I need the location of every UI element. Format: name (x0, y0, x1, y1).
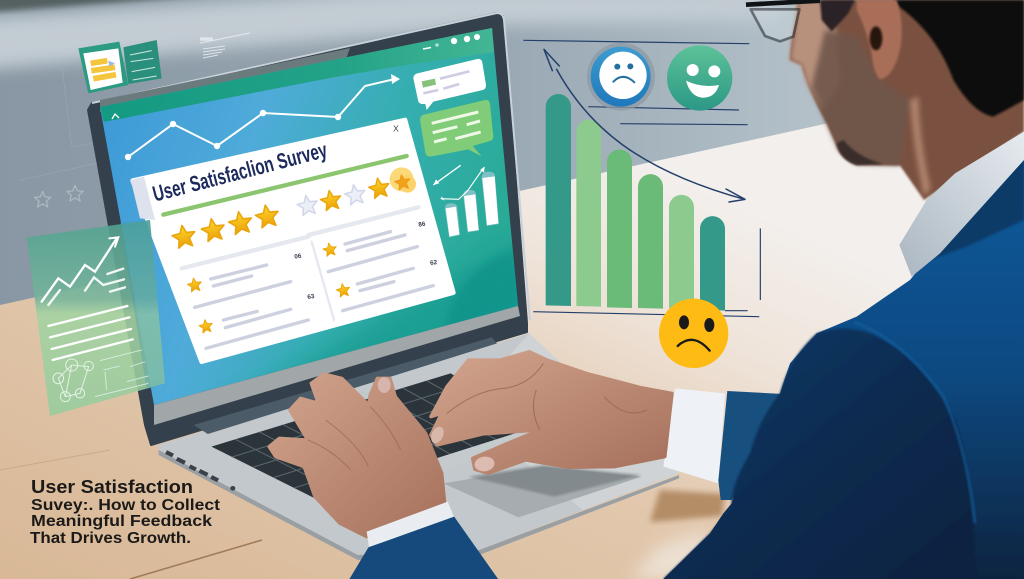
caption: Meaningful Feedback (31, 513, 212, 530)
ear (857, 0, 902, 79)
head, hair, ear and glasses (746, 0, 1024, 200)
caption (30, 476, 221, 547)
screen frame (88, 13, 530, 445)
laptop (88, 13, 679, 560)
decline chart with emojis (523, 40, 760, 368)
list scores: 62 (430, 259, 438, 267)
display chin (154, 306, 520, 425)
forearm sleeve (718, 391, 783, 500)
list scores: X (393, 124, 399, 134)
shirt cuff: left arm (367, 502, 454, 549)
upper arm (663, 329, 975, 579)
hinge (194, 337, 497, 434)
shirt collar (899, 132, 1024, 277)
survey card (131, 120, 453, 362)
keyboard (211, 373, 542, 498)
icon: teal list card (123, 40, 162, 84)
speech bubble: white (413, 59, 486, 110)
list scores: 63 (307, 293, 315, 301)
survey title: User Satisfaclion Survey (150, 137, 330, 207)
report trend arrow (42, 237, 125, 305)
laptop base (158, 333, 679, 560)
man (269, 0, 1024, 579)
caption: User Satisfaction (31, 476, 193, 497)
chart rules (523, 40, 760, 317)
list scores: 86 (418, 221, 426, 229)
jacket body (663, 157, 1024, 579)
star rating row (171, 167, 416, 249)
left sleeve (349, 517, 499, 579)
list scores: 06 (294, 253, 302, 261)
tiny floating note on wall (200, 33, 250, 58)
jacket collar shade (930, 157, 1024, 260)
face light (790, 0, 840, 110)
list stars (187, 242, 351, 333)
neck and head skin (790, 0, 1024, 200)
decorative outline stars (34, 185, 83, 207)
left hand (269, 374, 445, 537)
report text lines (48, 306, 133, 360)
list rows (182, 207, 433, 348)
caption: Suvey:. How to Collect (31, 497, 221, 514)
caption: That Drives Growth. (30, 530, 191, 547)
mini bar chart on screen (433, 165, 499, 237)
speech bubble: green (420, 100, 493, 157)
sad emoji: blue (587, 43, 655, 111)
list scores (294, 124, 438, 301)
line chart on screen (125, 74, 400, 160)
bars (546, 94, 725, 311)
jaw shadow (837, 140, 883, 165)
shoulder seam (853, 322, 975, 523)
title underline (163, 156, 407, 215)
neck highlight (910, 97, 931, 197)
jacket (663, 157, 1024, 579)
right hand (429, 352, 672, 473)
translucent green report panel (27, 220, 165, 416)
glasses (746, 1, 820, 41)
trackpad (443, 465, 642, 517)
hair (893, 0, 1024, 117)
hands and left sleeve (269, 352, 672, 579)
display (100, 28, 540, 425)
report network icon (53, 359, 93, 402)
stubble (812, 30, 910, 165)
sad emoji: yellow (659, 299, 728, 368)
window controls (112, 34, 480, 119)
shirt cuff: right arm (663, 388, 725, 483)
decline arrow (544, 49, 745, 202)
floating icons and panel at left (20, 40, 165, 416)
happy emoji: green (667, 45, 732, 111)
icon: document with bars (78, 42, 128, 93)
